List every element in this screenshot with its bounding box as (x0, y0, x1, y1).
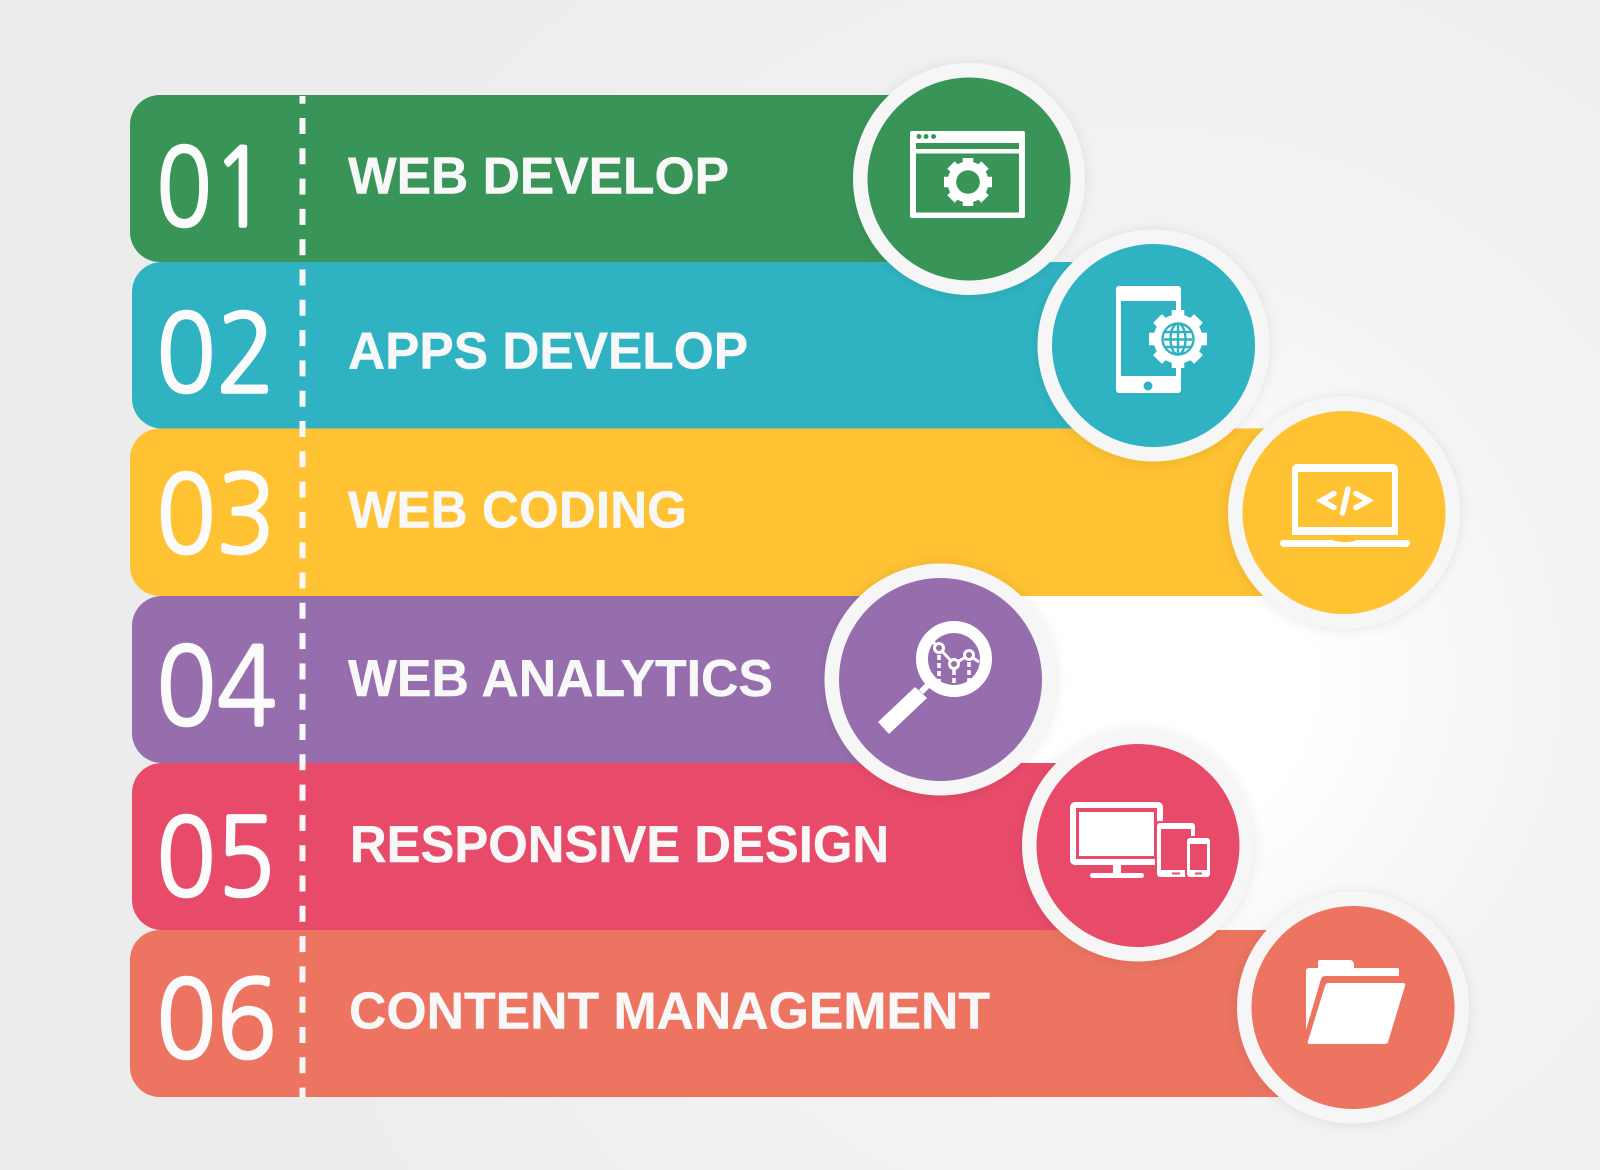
bar 06: content management (130, 930, 1353, 1097)
bar 04: web analytics (132, 596, 940, 763)
bar 03: web coding (130, 428, 1344, 596)
bar 03: web coding: WEB CODING (348, 482, 687, 540)
bar 01: web develop: 01 (156, 134, 268, 242)
dashed divider (300, 96, 306, 1097)
bar 02: apps develop: APPS DEVELOP (348, 322, 748, 380)
circle 01: browser settings (853, 63, 1085, 295)
icon: open folder (1306, 960, 1405, 1044)
bar 05: responsive design: 05 (156, 804, 276, 912)
circle 02: mobile app globe (1038, 230, 1270, 462)
circle 04: analytics magnifier (824, 564, 1056, 796)
circle 06: content folder (1237, 892, 1469, 1124)
bar 03: web coding: 03 (156, 461, 276, 569)
bar 02: apps develop (132, 262, 1153, 428)
bar 04: web analytics: 04 (156, 633, 277, 741)
icon: browser window with gear (910, 131, 1025, 218)
bar 05: responsive design: RESPONSIVE DESIGN (350, 816, 889, 874)
bar 06: content management: 06 (156, 966, 277, 1074)
bar 04: web analytics: WEB ANALYTICS (348, 650, 773, 708)
icon: magnifier with chart (878, 627, 986, 734)
circle 05: responsive devices (1022, 730, 1254, 962)
icon: monitor, tablet and phone (1070, 802, 1212, 879)
bar 06: content management: CONTENT MANAGEMENT (349, 982, 990, 1040)
bar 02: apps develop: 02 (156, 300, 276, 408)
bars (130, 95, 1353, 1097)
bar 01: web develop (130, 95, 969, 262)
bar 05: responsive design (132, 763, 1138, 930)
circle 03: code laptop (1228, 396, 1460, 628)
bar 01: web develop: WEB DEVELOP (348, 148, 729, 206)
icon: phone with globe gear (1116, 286, 1207, 393)
icon: laptop with code (1280, 464, 1410, 547)
